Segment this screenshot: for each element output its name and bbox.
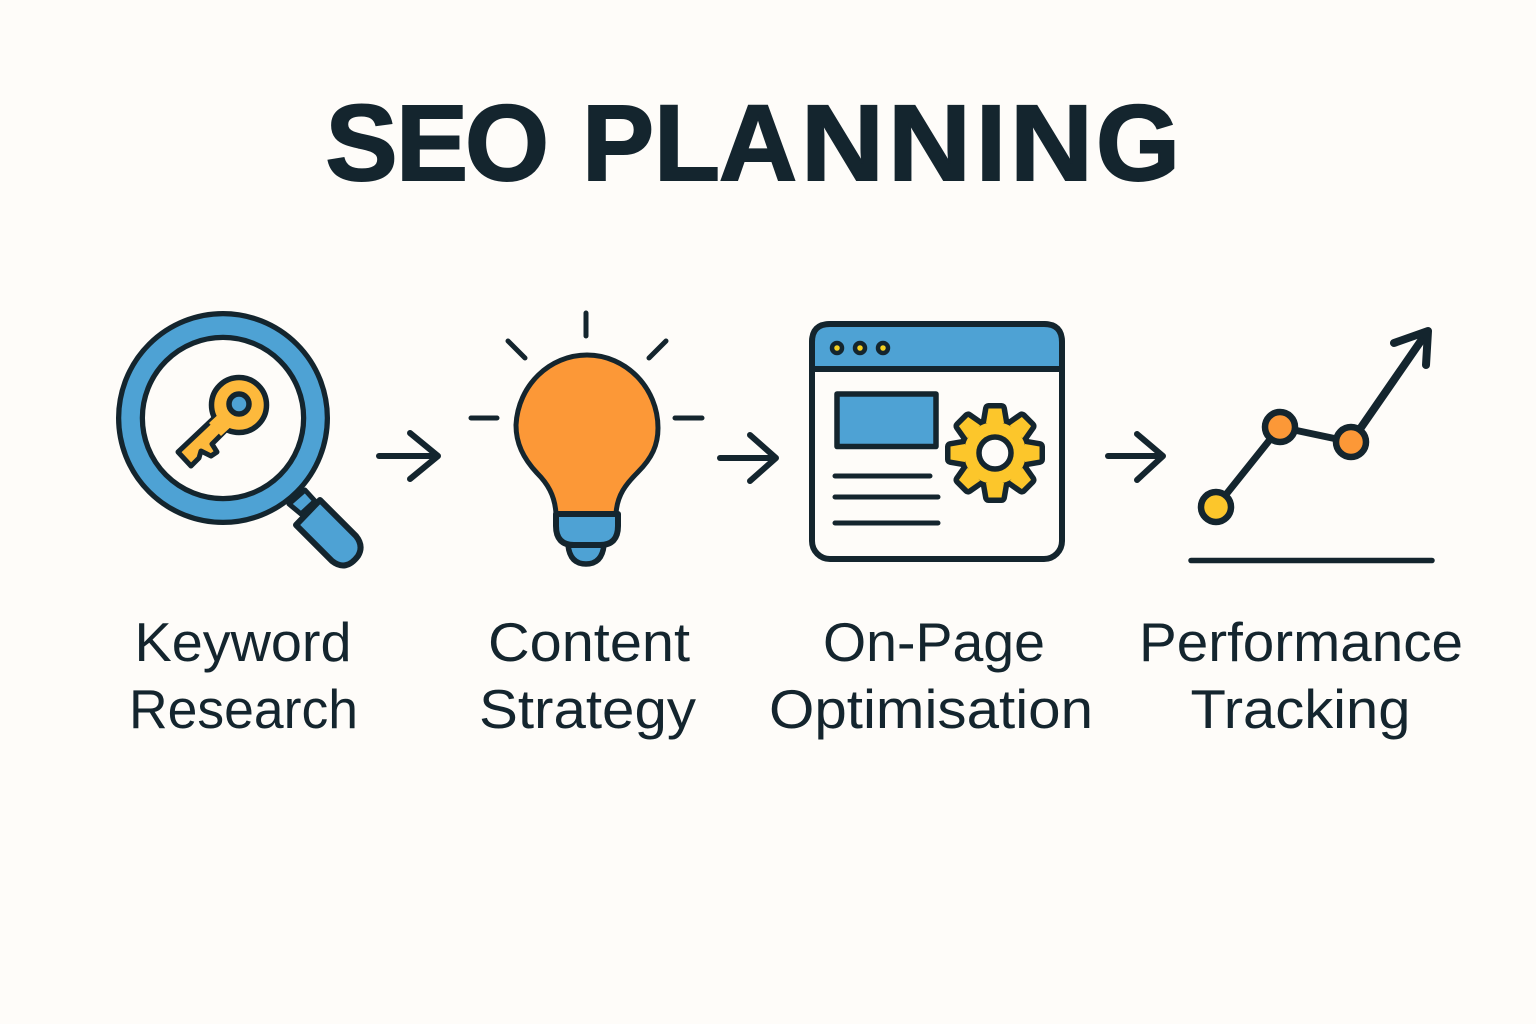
label: Content Strategy: Strategy: [479, 678, 697, 740]
icon: line chart with arrow: [1191, 331, 1432, 560]
title: G: [1096, 82, 1180, 203]
icon: browser window with gear: [812, 324, 1062, 559]
label: Keyword Research: Keyword: [134, 611, 352, 673]
label: Performance Tracking: Performance: [1139, 611, 1463, 673]
gear: [950, 408, 1040, 498]
arrow 2: [720, 435, 776, 481]
title: I: [976, 82, 1006, 203]
icon: magnifying glass with key: [130, 326, 361, 565]
title: N: [888, 82, 971, 203]
label: Performance Tracking: [1139, 611, 1463, 740]
label: On-Page Optimisation: On-Page: [823, 611, 1045, 673]
icon: light bulb: [471, 313, 702, 564]
arrow 3: [1108, 434, 1163, 480]
arrow 1: [379, 433, 438, 479]
label: Keyword Research: Research: [129, 678, 358, 740]
title: N: [1010, 82, 1093, 203]
title: N: [801, 82, 884, 203]
label: Content Strategy: [479, 611, 697, 740]
title: SEO PLA: [326, 82, 797, 203]
label: Keyword Research: [129, 611, 358, 740]
label: On-Page Optimisation: [769, 611, 1093, 740]
label: On-Page Optimisation: Optimisation: [769, 678, 1093, 740]
label: Performance Tracking: Tracking: [1190, 678, 1410, 740]
label: Content Strategy: Content: [488, 611, 690, 673]
